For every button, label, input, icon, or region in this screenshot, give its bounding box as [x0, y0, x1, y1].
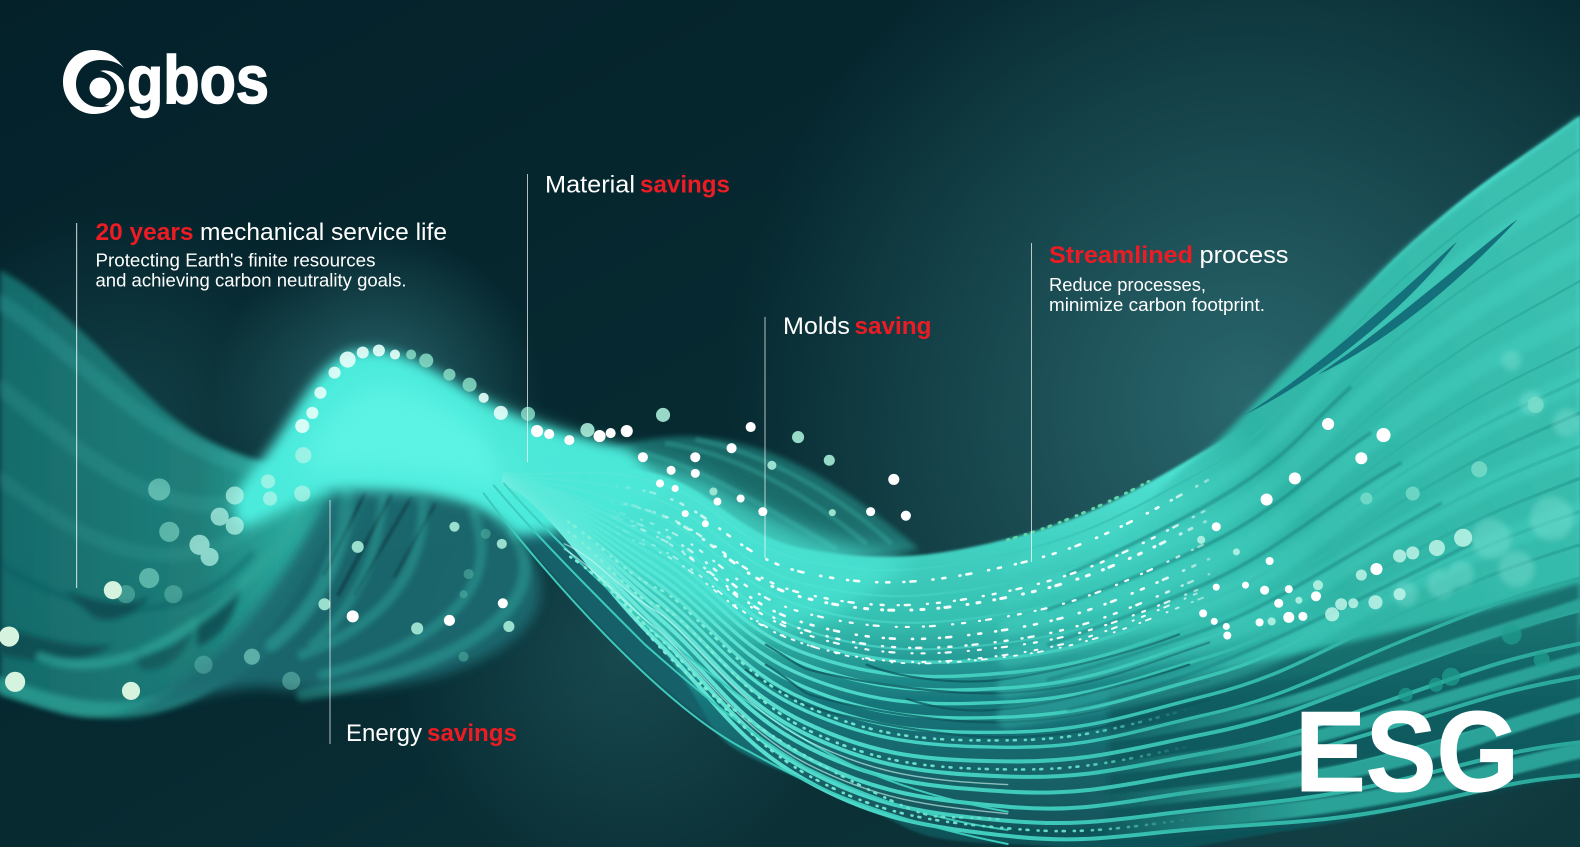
callout: Material savings: savings — [640, 172, 730, 198]
callout: Streamlined process: Streamlined — [1049, 242, 1193, 269]
callout: 20 years mechanical service life: and achieving carbon neutrality goals. — [96, 270, 406, 290]
callout: Molds saving — [764, 313, 932, 558]
dark gaps between mid strands — [746, 634, 1209, 737]
callout: Energy savings — [330, 500, 517, 747]
bokeh light dots: right strands — [1197, 397, 1550, 702]
bokeh light dots: hump crest — [295, 344, 535, 433]
glitter specks on the fibres — [504, 479, 1215, 831]
callout: Material savings: Material — [545, 172, 635, 198]
callout: Streamlined process: process — [1200, 242, 1288, 269]
lower outer fibres backing — [484, 493, 1048, 844]
glowing hump crest — [234, 350, 665, 536]
callout: Streamlined process — [1031, 242, 1288, 562]
callout: Streamlined process: Reduce processes, — [1049, 274, 1206, 295]
fan of strands beneath the hump — [111, 481, 541, 717]
callout: Streamlined process: minimize carbon footprint. — [1049, 294, 1265, 315]
callout: Energy savings: savings — [427, 720, 517, 747]
dark gaps between upper right strands — [1244, 220, 1518, 415]
callout: Energy savings: Energy — [346, 720, 422, 747]
fibre strands — [484, 149, 1580, 844]
callout: Material savings — [527, 172, 730, 462]
bokeh light dots: fan and centre — [318, 408, 911, 662]
logo wordmark: gbos — [127, 42, 269, 118]
ESG title: ESG — [1295, 689, 1519, 816]
logo: gbos — [63, 42, 269, 118]
bright glow over the fibre origin — [474, 398, 912, 628]
central fan above the main band — [605, 437, 919, 564]
broad right-hand strands — [1008, 182, 1580, 830]
callout: 20 years mechanical service life: mechanical service life — [200, 219, 447, 246]
main flowing band — [504, 116, 1580, 847]
soft bokeh glow on the right — [1394, 350, 1580, 606]
icon: swirl — [63, 50, 125, 114]
left translucent wave — [0, 270, 358, 717]
callout: 20 years mechanical service life: 20 years — [96, 219, 194, 246]
callout: 20 years mechanical service life — [76, 219, 447, 588]
bokeh light dots: left wave — [0, 447, 311, 700]
darker lower right bundle — [1108, 582, 1580, 841]
callout: Molds saving: Molds — [783, 313, 850, 340]
callout: 20 years mechanical service life: Protecting Earth's finite resources — [96, 250, 376, 270]
callout: Molds saving: saving — [854, 313, 932, 340]
